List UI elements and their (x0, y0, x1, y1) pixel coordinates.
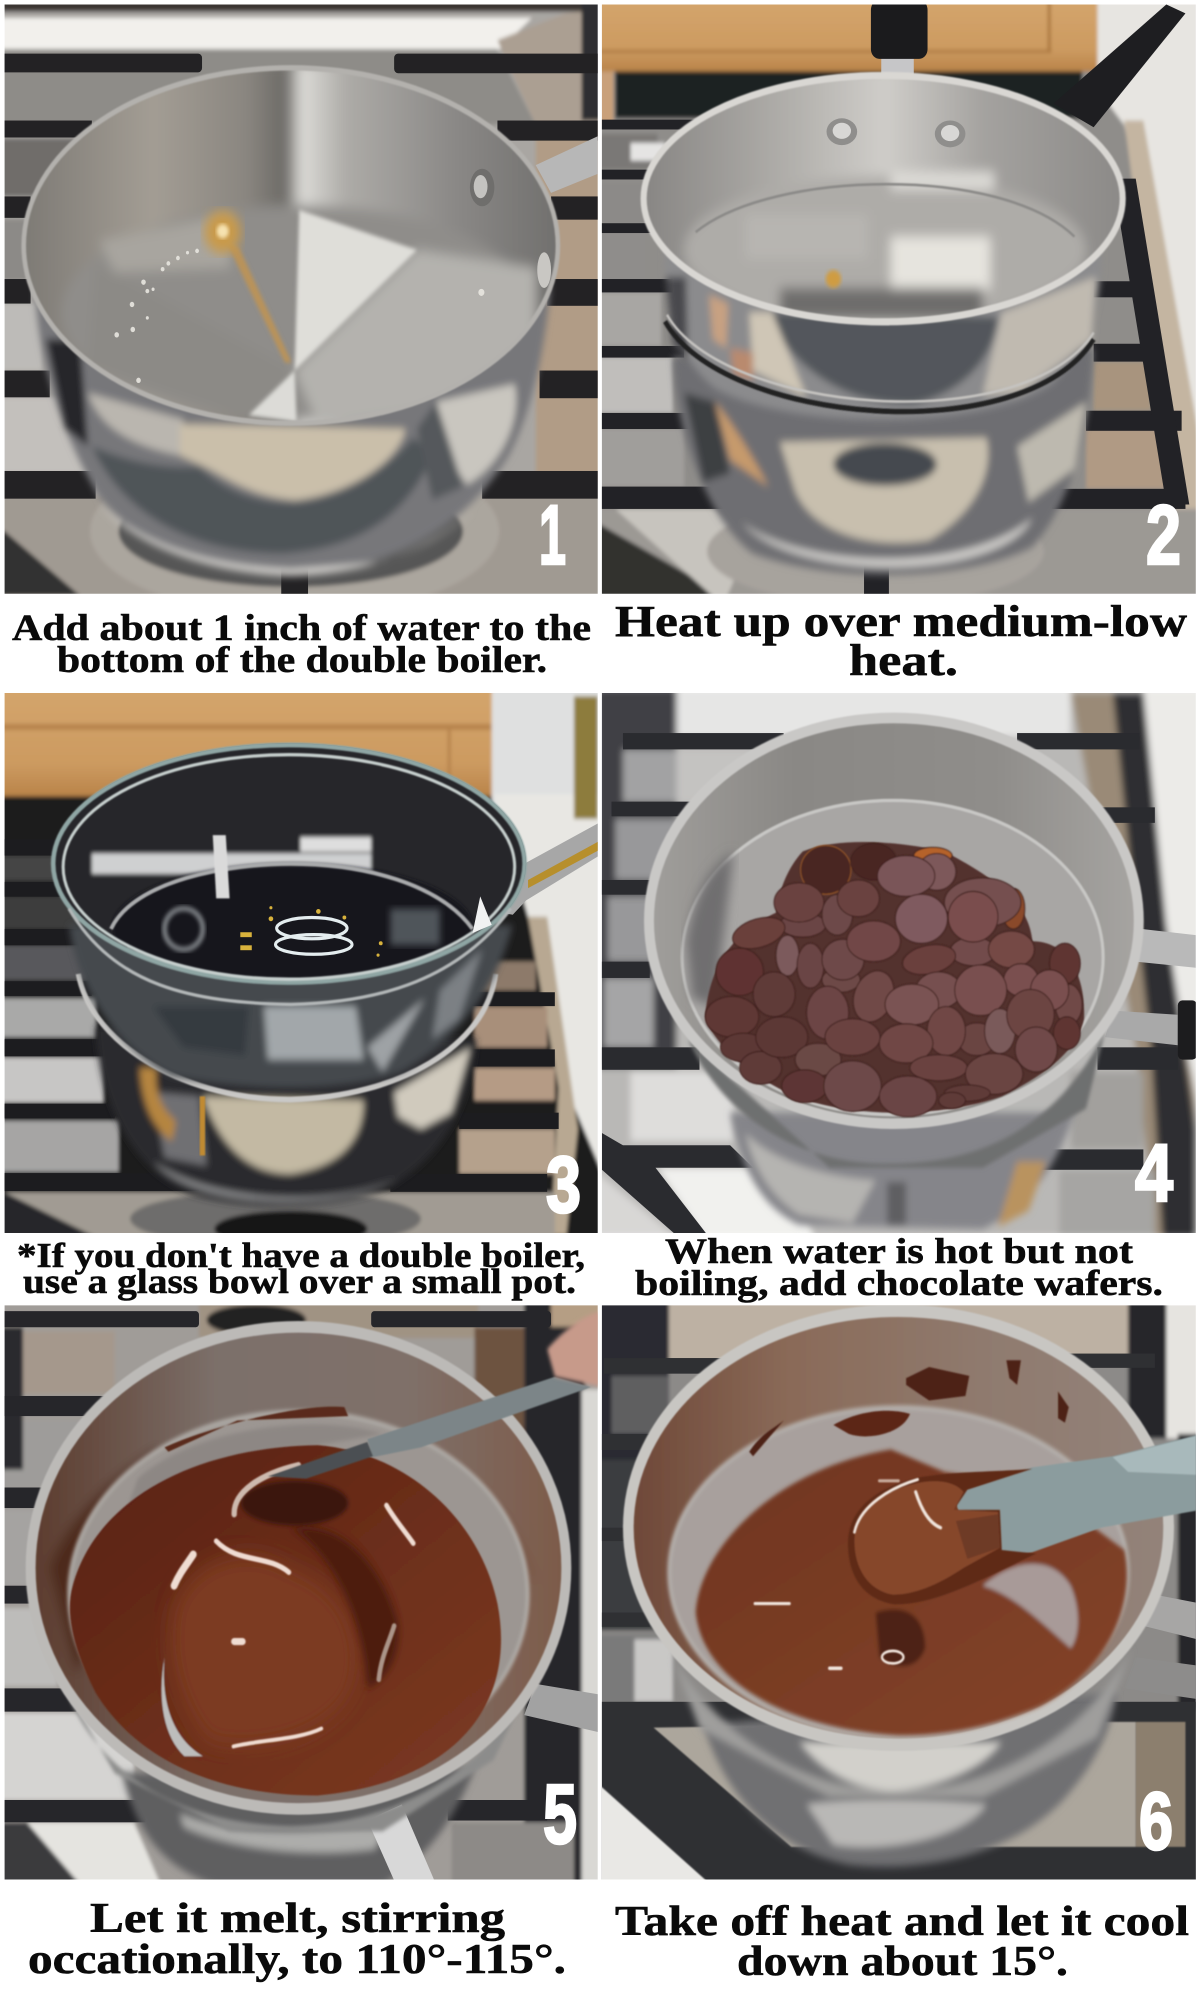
pot rim (31, 1327, 566, 1809)
photo: glass bowl over small pot (0, 688, 603, 1247)
pot handle (536, 134, 603, 193)
caption step 6: down about 15°. (737, 1939, 1068, 1985)
panel: step 3 glass bowl alternative (0, 688, 603, 1301)
step number 6: 6 (1139, 1776, 1173, 1867)
chocolate gloss highlights (755, 1479, 941, 1668)
inner bowl (682, 800, 1103, 1115)
chocolate gloss highlights (174, 1465, 413, 1746)
step number 2: 2 (1146, 488, 1181, 582)
chocolate on spatula (848, 1469, 1036, 1604)
lower pot (673, 348, 1094, 575)
photo: saucepan with water on stove (0, 0, 603, 616)
photo: spatula lifting melted chocolate (596, 1300, 1200, 1885)
rivets (827, 118, 965, 147)
caption step 2: Heat up over medium-low (615, 597, 1187, 646)
melted chocolate (70, 1445, 501, 1796)
water bubbles (114, 249, 484, 383)
chocolate drips on pot wall (749, 1360, 1069, 1456)
pot body (65, 1679, 532, 1831)
lower pot (122, 1769, 474, 1885)
pot rim (628, 1311, 1169, 1745)
step number 4: 4 (1135, 1128, 1173, 1219)
pot body (688, 1031, 1105, 1168)
caption step 4: boiling, add chocolate wafers. (635, 1263, 1163, 1303)
photo: double boiler on stove (596, 0, 1200, 605)
caption step 1: bottom of the double boiler. (57, 640, 547, 681)
lower pot (703, 1693, 1117, 1867)
pot side handles (1105, 929, 1197, 1060)
panel: step 2 heat up (596, 0, 1200, 685)
seam between pots (665, 321, 1094, 412)
stove grate bars (600, 120, 1189, 598)
right pot handle (524, 1684, 603, 1733)
photo: stirring melted chocolate (0, 1300, 603, 1885)
caption step 2 (615, 597, 1187, 685)
pot rim (78, 974, 496, 1100)
panel: step 6 cool down (596, 1300, 1200, 1985)
pot interior (649, 78, 1120, 319)
caption step 5 (28, 1896, 566, 1983)
stove grate bars (0, 1311, 551, 1822)
pot body (673, 1648, 1132, 1798)
small pot body (96, 1027, 476, 1206)
pot outer body (34, 286, 551, 576)
gold light dots (240, 906, 383, 957)
hand holding spatula (547, 1311, 603, 1387)
bright glint (473, 896, 492, 933)
caption step 4: When water is hot but not (665, 1231, 1133, 1271)
gold pot handle (508, 824, 598, 915)
caption step 6 (615, 1899, 1189, 1985)
step number 5: 5 (543, 1767, 577, 1861)
upper pot insert (662, 272, 1104, 422)
panel: step 1 add water (0, 0, 603, 681)
caption step 5: occationally, to 110°-115°. (28, 1937, 566, 1983)
pot rim (649, 718, 1139, 1124)
rim rivets (470, 169, 551, 288)
photo: chocolate wafers in double boiler (596, 688, 1200, 1237)
panel: step 4 add chocolate wafers (596, 688, 1200, 1303)
caption step 2: heat. (849, 636, 958, 685)
pot interior (15, 63, 566, 433)
stove grate bars (0, 54, 603, 596)
caption step 6: Take off heat and let it cool (615, 1899, 1189, 1945)
right pot handles (1124, 1595, 1200, 1700)
caption step 3: use a glass bowl over a small pot. (23, 1262, 576, 1301)
caption step 3 (17, 1236, 585, 1301)
stove frame and bars (596, 1354, 1200, 1885)
bowl interior (55, 743, 526, 978)
bowl rim (53, 745, 525, 1004)
pot rim (644, 75, 1123, 322)
front pot handle (367, 1804, 434, 1880)
pot rim (24, 68, 558, 423)
caption step 3: *If you don't have a double boiler, (17, 1236, 585, 1275)
stove grate bars (0, 839, 559, 1192)
black rear handle (870, 4, 928, 74)
pot interior (27, 1322, 570, 1813)
stove plate and corner (596, 1722, 1185, 1885)
panel: step 5 melt and stir (0, 1300, 603, 1983)
spatula (268, 1377, 591, 1479)
caption step 1 (12, 608, 591, 681)
caption step 4 (635, 1231, 1163, 1303)
caption step 5: Let it melt, stirring (90, 1896, 505, 1942)
step number 1: 1 (539, 488, 566, 582)
burner ring reflection (276, 918, 352, 954)
spatula blade and handle (955, 1434, 1200, 1559)
lower pot (730, 1113, 1074, 1229)
glass bowl body (69, 925, 513, 1088)
chocolate wafers (705, 843, 1082, 1117)
caption step 1: Add about 1 inch of water to the (12, 608, 591, 649)
pot interior wall (642, 713, 1147, 1129)
stove grate bars (600, 733, 1178, 1237)
melted chocolate pool (696, 1450, 1127, 1735)
pot interior wall (623, 1304, 1174, 1746)
chocolate wafer heap base (705, 842, 1084, 1112)
step number 3: 3 (546, 1140, 581, 1229)
black side handle (1071, 4, 1186, 128)
